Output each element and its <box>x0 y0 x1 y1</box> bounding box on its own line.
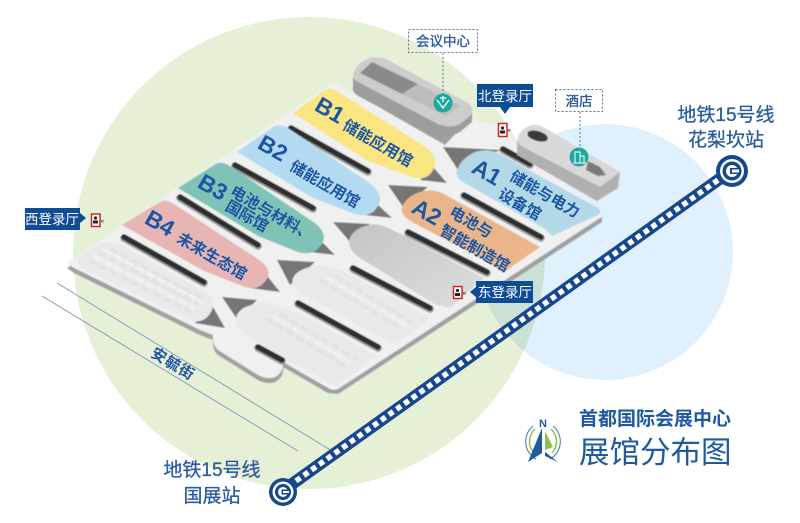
label: 西登录厅 <box>25 208 86 230</box>
street: 安毓街 <box>42 283 332 451</box>
hall: 白色展馆 2 <box>236 303 376 386</box>
label: hall B2: 储能应用馆 <box>287 156 363 212</box>
label: 地铁15号线 国展站: 地铁15号线 <box>163 459 261 481</box>
hall: 白色展馆 3 <box>292 265 430 345</box>
label: hall B3 <box>194 168 317 244</box>
hall A1 <box>456 150 600 236</box>
hall B4 <box>122 201 269 288</box>
label: 地铁15号线 国展站 <box>163 459 261 507</box>
icon: 北登录厅 entrance <box>498 124 512 136</box>
hall B1 <box>293 89 435 178</box>
plate side <box>67 89 602 394</box>
label: hall B4: B4 <box>141 204 179 242</box>
label: 酒店: 酒店 <box>566 94 592 109</box>
label: hall A1: 设备馆 <box>495 184 545 224</box>
building: 会议中心 <box>353 57 472 138</box>
label: 酒店 <box>556 90 602 150</box>
label: hall A2: A2 <box>408 193 446 231</box>
label: hall B1: B1 <box>311 91 349 129</box>
label: 会议中心: 会议中心 <box>416 34 470 49</box>
background circle: green zone <box>73 17 545 489</box>
label: hall A1: A1 <box>468 153 506 191</box>
label: 地铁15号线 花梨坎站: 地铁15号线 <box>677 104 775 126</box>
icon: 国展站 metro station <box>269 478 297 506</box>
metro line 15 <box>285 170 732 489</box>
label: 东登录厅 <box>470 281 533 303</box>
icon: 西登录厅 entrance <box>92 214 104 226</box>
label: hall B2: B2 <box>254 129 292 167</box>
label: hall A1 <box>468 153 583 224</box>
label: hall A2 <box>408 193 513 276</box>
label: hall B3: 国际馆 <box>222 196 272 236</box>
icon: 会议中心 pin <box>434 94 452 112</box>
valleys between halls <box>195 147 500 328</box>
label: 西登录厅: 西登录厅 <box>25 212 79 227</box>
building: 酒店 <box>517 125 620 201</box>
plate top <box>67 83 603 390</box>
label: hall A2: 电池与 <box>446 203 495 242</box>
icon: 酒店 pin <box>570 148 588 166</box>
icon: compass: N <box>539 418 547 430</box>
label: hall B4: 未来生态馆 <box>174 228 250 284</box>
label: hall B3: 电池与材料、 <box>227 182 317 244</box>
label: 北登录厅: 北登录厅 <box>478 89 532 104</box>
label: hall B4 <box>141 204 250 284</box>
street: 安毓街: 安毓街 <box>148 344 198 384</box>
label: hall B1 <box>311 91 416 171</box>
label: 地铁15号线 国展站: 国展站 <box>183 485 241 507</box>
title <box>579 407 732 470</box>
icon: compass <box>526 418 560 462</box>
icon: 花梨坎站 metro station <box>716 155 748 187</box>
label: hall B1: 储能应用馆 <box>340 115 416 171</box>
hall: 灰色展馆 <box>349 224 484 308</box>
title: 展馆分布图 <box>579 436 732 470</box>
icon: 北登录厅 entrance: « <box>508 127 512 134</box>
icon: 西登录厅 entrance: « <box>100 218 104 225</box>
title: 首都国际会展中心 <box>579 407 731 430</box>
hall B3 <box>178 163 324 253</box>
label: 会议中心 <box>408 30 478 95</box>
label: hall B2 <box>254 129 363 212</box>
label: 地铁15号线 花梨坎站 <box>677 104 775 151</box>
exhibition complex model <box>67 57 620 394</box>
label: 地铁15号线 花梨坎站: 花梨坎站 <box>688 129 764 151</box>
label: hall A2: 智能制造馆 <box>437 220 513 276</box>
background circle: blue zone <box>477 124 733 380</box>
label: hall B3: B3 <box>194 168 232 206</box>
hall B2 <box>237 125 380 215</box>
hall: 白色展馆 1 <box>76 242 213 321</box>
icon: 东登录厅 entrance <box>454 286 466 298</box>
label: 北登录厅 <box>477 84 533 114</box>
slots <box>124 128 541 361</box>
label: hall A1: 储能与电力 <box>507 166 583 222</box>
icon: 东登录厅 entrance: « <box>462 290 466 297</box>
label: 东登录厅: 东登录厅 <box>478 285 532 300</box>
hall A2 <box>402 190 540 273</box>
